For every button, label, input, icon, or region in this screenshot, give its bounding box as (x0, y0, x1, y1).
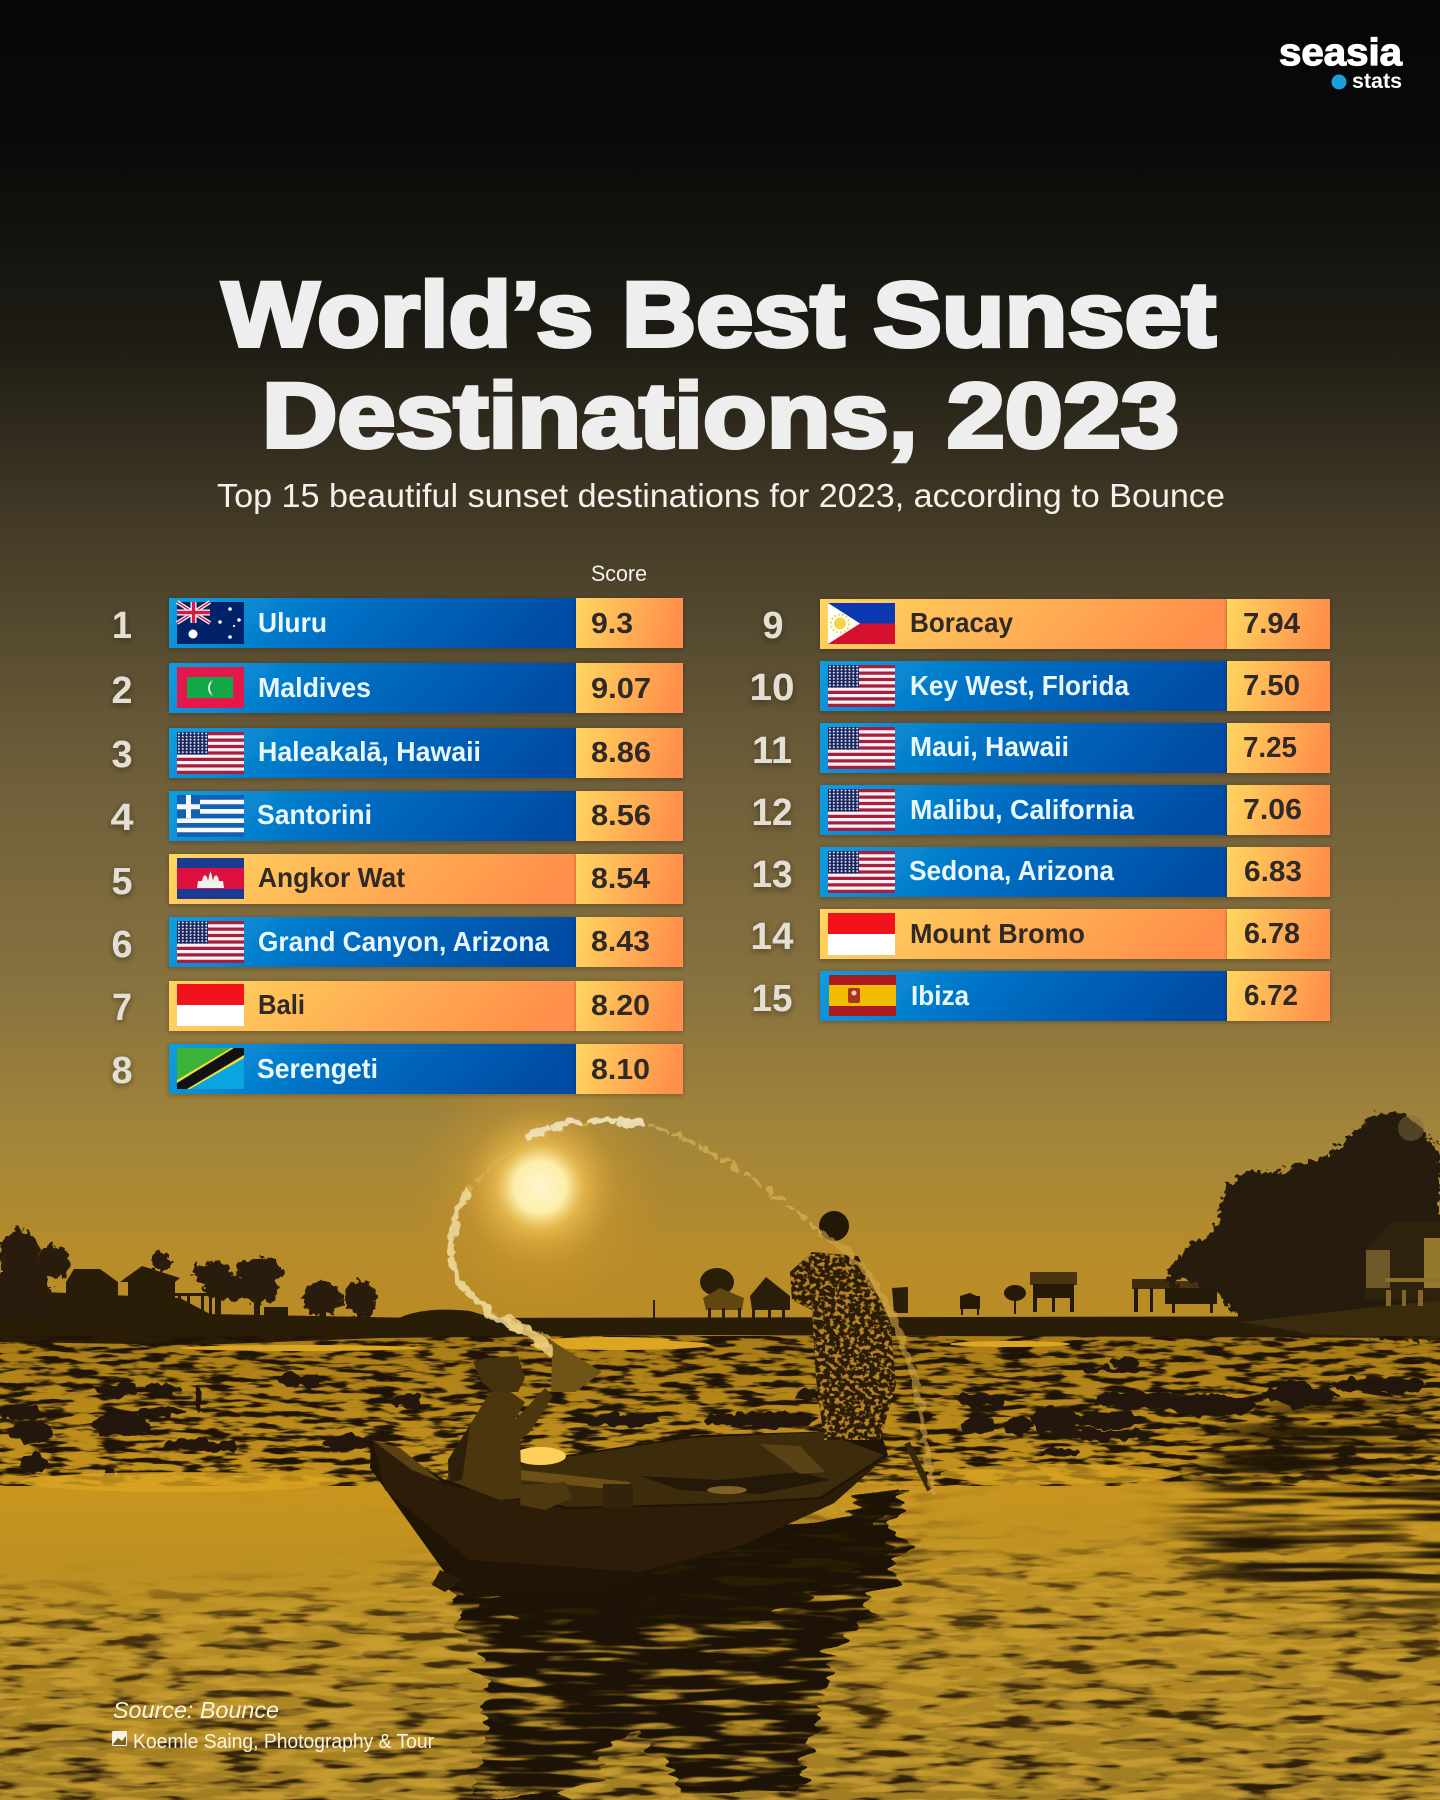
title: Destinations, 2023 (262, 365, 1179, 467)
row 6: Grand Canyon, Arizona: 6 (112, 924, 132, 966)
row 11: Maui, Hawaii: Maui, Hawaii (910, 731, 1069, 762)
ripples on foreground water (0, 1460, 1440, 1800)
row 11: Maui, Hawaii: 7.25 (1243, 732, 1297, 764)
right treeline with huts and houses (960, 1108, 1440, 1340)
row 4: Santorini: 4 (110, 797, 134, 839)
water surface (0, 1325, 1440, 1800)
row 13: Sedona, Arizona: 6.83 (1244, 856, 1302, 888)
flag: Spain (829, 975, 896, 1016)
photo: sunset over a lotus lake with fishermen (0, 1057, 1440, 1800)
flag: Maldives (177, 667, 244, 708)
flag: Cambodia (177, 858, 244, 899)
row 4: Santorini: 8.56 (591, 800, 651, 832)
row 12: Malibu, California (752, 785, 1330, 835)
row 5: Angkor Wat: Angkor Wat (258, 862, 405, 893)
row 7: Bali (112, 981, 683, 1031)
flag: United States (177, 921, 244, 963)
row 15: Ibiza: Ibiza (911, 980, 969, 1011)
row 14: Mount Bromo: Mount Bromo (910, 918, 1085, 949)
dark striped water at right (1152, 1380, 1440, 1636)
flag: Indonesia (177, 984, 244, 1026)
row 11: Maui, Hawaii (752, 723, 1330, 773)
flag: United States (828, 789, 895, 831)
title (222, 264, 1216, 467)
bright water glints among lotus pads (20, 1337, 1180, 1492)
row 8: Serengeti (112, 1044, 683, 1094)
logo: seasia stats (1279, 32, 1403, 93)
lotus pads left (0, 1373, 420, 1480)
row 9: Boracay: 7.94 (1243, 608, 1300, 640)
row 10: Key West, Florida: 10 (750, 667, 794, 709)
row 1: Uluru: 1 (112, 605, 132, 647)
seated fisherman (448, 1338, 602, 1510)
row 13: Sedona, Arizona: 13 (752, 854, 792, 896)
glint of sun on water (514, 1447, 566, 1465)
row 15: Ibiza: 6.72 (1244, 980, 1298, 1012)
logo icon (1332, 74, 1346, 90)
row 5: Angkor Wat: 8.54 (591, 863, 650, 895)
row 4: Santorini: Santorini (257, 799, 372, 830)
row 2: Maldives: Maldives (258, 672, 371, 703)
row 8: Serengeti: 8.10 (591, 1054, 650, 1086)
middle stilt huts on the horizon (653, 1268, 908, 1320)
flag: Indonesia (828, 913, 895, 955)
row 8: Serengeti: 8 (112, 1050, 132, 1092)
row 6: Grand Canyon, Arizona: Grand Canyon, Arizona (258, 926, 549, 957)
boat hull (370, 1430, 888, 1598)
row 2: Maldives: 2 (112, 670, 132, 712)
score column heading: Score (591, 561, 647, 586)
row 5: Angkor Wat: 5 (112, 861, 132, 903)
row 9: Boracay: Boracay (910, 607, 1013, 638)
row 8: Serengeti: Serengeti (257, 1053, 378, 1084)
photo credit: Koemle Saing, Photography & Tour (133, 1731, 434, 1753)
row 6: Grand Canyon, Arizona (112, 917, 683, 967)
row 10: Key West, Florida: 7.50 (1243, 670, 1300, 702)
flag: United States (828, 665, 895, 707)
lotus field noise (0, 1336, 1440, 1486)
flag: Tanzania (177, 1048, 244, 1089)
row 4: Santorini (110, 791, 683, 841)
flag: Australia (177, 602, 244, 644)
standing fisherman (785, 1211, 930, 1490)
row 14: Mount Bromo (750, 909, 1330, 959)
logo: seasia stats: stats (1352, 70, 1402, 93)
row 2: Maldives (112, 663, 683, 713)
row 12: Malibu, California: 7.06 (1243, 794, 1302, 826)
row 1: Uluru: Uluru (258, 607, 327, 638)
row 7: Bali: 8.20 (591, 990, 650, 1022)
row 14: Mount Bromo: 14 (750, 916, 794, 958)
row 3: Haleakala, Hawaii: 8.86 (591, 737, 651, 769)
row 7: Bali: Bali (258, 989, 305, 1020)
flag: Philippines (828, 603, 895, 644)
flag: United States (177, 732, 244, 774)
flag: Greece (177, 795, 244, 837)
lakeside house at right (1365, 1222, 1440, 1306)
logo: seasia stats: seasia (1279, 32, 1403, 74)
row 14: Mount Bromo: 6.78 (1244, 918, 1300, 950)
row 10: Key West, Florida (750, 661, 1330, 711)
row 9: Boracay (762, 599, 1330, 649)
row 13: Sedona, Arizona (752, 847, 1330, 897)
row 7: Bali: 7 (112, 987, 132, 1029)
row 1: Uluru: 9.3 (591, 608, 633, 640)
row 13: Sedona, Arizona: Sedona, Arizona (909, 855, 1114, 886)
row 12: Malibu, California: 12 (752, 792, 792, 834)
row 3: Haleakala, Hawaii (112, 728, 683, 778)
row 15: Ibiza: 15 (752, 978, 792, 1020)
row 1: Uluru (112, 598, 683, 648)
row 3: Haleakala, Hawaii: Haleakalā, Hawaii (258, 736, 481, 767)
row 15: Ibiza (752, 971, 1330, 1021)
left treeline with palms and stilt houses (0, 1230, 1440, 1345)
row 5: Angkor Wat (112, 854, 683, 904)
arc of water thrown by the net (449, 1120, 932, 1490)
row 6: Grand Canyon, Arizona: 8.43 (591, 926, 650, 958)
cast net bag (547, 1338, 602, 1392)
row 3: Haleakala, Hawaii: 3 (112, 734, 132, 776)
flag: United States (828, 851, 895, 893)
row 9: Boracay: 9 (762, 605, 784, 647)
row 12: Malibu, California: Malibu, California (910, 794, 1134, 825)
row 10: Key West, Florida: Key West, Florida (910, 670, 1129, 701)
sun (410, 1057, 670, 1317)
row 11: Maui, Hawaii: 11 (752, 730, 792, 772)
icon: photo (112, 1731, 127, 1746)
boat reflection (430, 1490, 915, 1800)
flag: United States (828, 727, 895, 769)
source note: Source: Bounce (113, 1697, 279, 1723)
subtitle: Top 15 beautiful sunset destinations for 2023, according to Bounce (217, 477, 1225, 514)
title: World’s Best Sunset (222, 264, 1216, 366)
lotus pads right (582, 1358, 1426, 1457)
row 2: Maldives: 9.07 (591, 673, 651, 705)
